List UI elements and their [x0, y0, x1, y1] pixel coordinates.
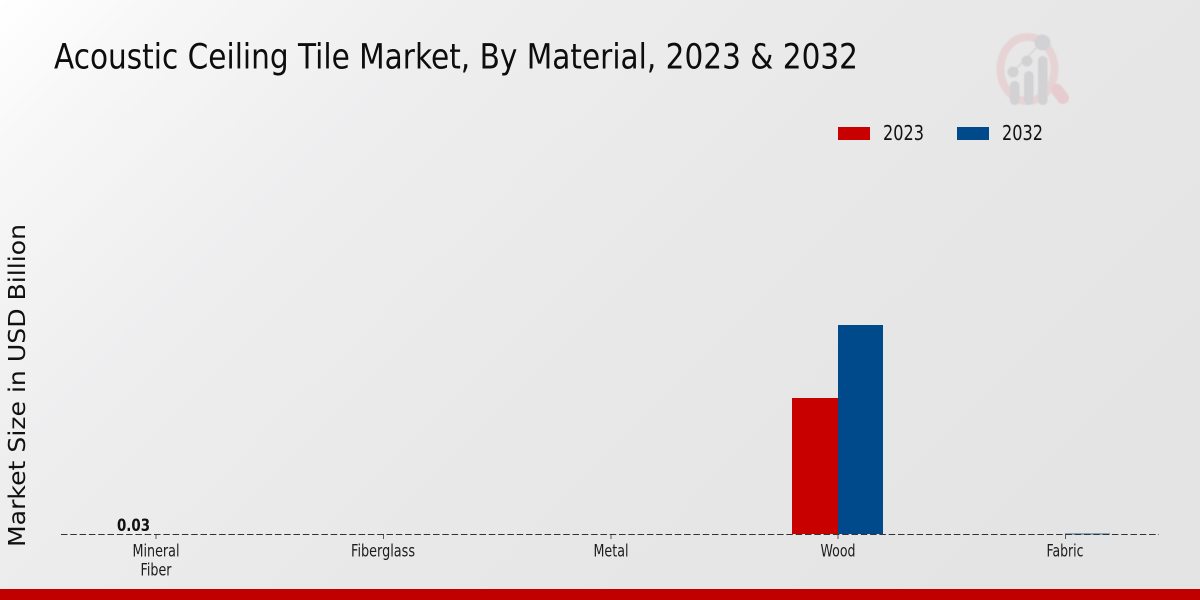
category labels: Metal: [594, 542, 628, 562]
icon: magnifier logo watermark: [1000, 34, 1063, 105]
category labels: [132, 542, 1084, 580]
footer bar: [0, 589, 1200, 600]
x axis ticks: [156, 534, 1066, 539]
category labels: Mineral: [132, 542, 180, 562]
legend item: 2023: 2023: [883, 121, 924, 145]
title: Acoustic Ceiling Tile Market, By Material, 2023 & 2032: [54, 38, 858, 78]
category labels: Fiber: [140, 560, 172, 580]
bar chart: [61, 325, 1159, 580]
category labels: Wood: [820, 542, 856, 562]
legend: [838, 121, 1043, 145]
bars: Wood: [792, 325, 883, 534]
bar: Fabric 2032: [1065, 533, 1110, 535]
legend item: 2032: 2032: [1002, 121, 1043, 145]
legend item: 2023: [838, 121, 924, 145]
y axis title: Market Size in USD Billion: [4, 224, 31, 547]
x axis baseline: [61, 534, 1159, 536]
category labels: Fabric: [1046, 542, 1084, 562]
legend item: 2032: [957, 121, 1043, 145]
data label: 0.03: [117, 516, 150, 535]
category labels: Fiberglass: [351, 542, 415, 562]
